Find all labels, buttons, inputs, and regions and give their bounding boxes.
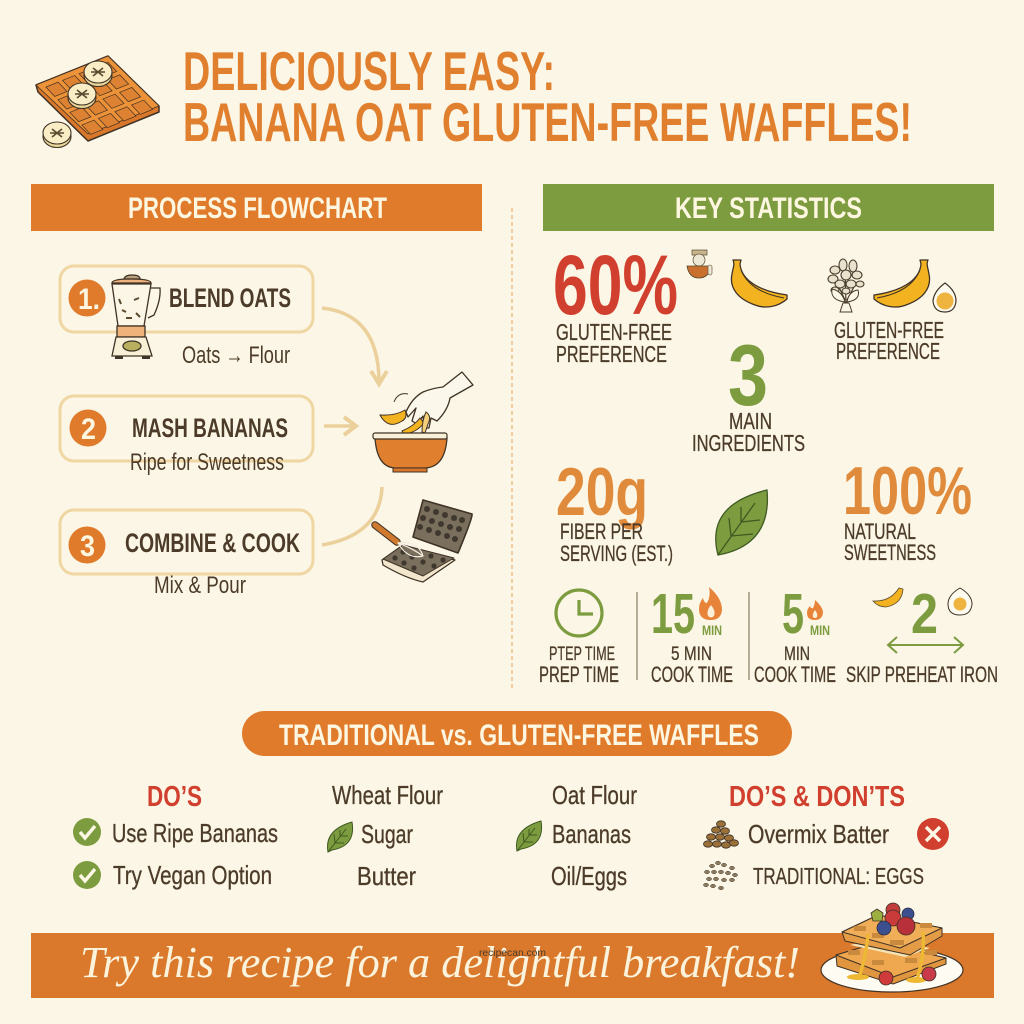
panel: process flowchart header: PROCESS FLOWCHART xyxy=(128,192,387,225)
column: do's and don'ts: Overmix Batter xyxy=(748,819,889,849)
stat: 60% gluten-free preference: GLUTEN-FREE xyxy=(556,319,672,345)
stat: gluten-free preference: GLUTEN-FREE xyxy=(834,317,944,343)
icon: waffle iron with whisk xyxy=(375,500,472,582)
stat: 15 min cook time: MIN xyxy=(702,622,722,638)
panel: step 3 combine and cook: 3 xyxy=(80,530,95,563)
title: DELICIOUSLY EASY: xyxy=(183,40,555,102)
stat: 3 main ingredients: MAIN xyxy=(729,408,772,434)
stat: 20g fiber: 20g xyxy=(556,454,648,530)
stat: 5 min cook time: MIN xyxy=(784,644,810,665)
stat: 60% gluten-free preference: PREFERENCE xyxy=(556,341,667,367)
icon: small banana xyxy=(873,588,903,607)
stat: prep time with clock xyxy=(539,590,619,687)
stat: 2 skip preheat iron: 2 xyxy=(911,582,938,646)
stat: 15 min cook time: 5 MIN xyxy=(671,644,712,665)
banner: footer: Try this recipe for a delightful breakfast! xyxy=(80,938,800,987)
stat: 100% natural sweetness: SWEETNESS xyxy=(844,540,936,565)
panel: step 1 blend oats: BLEND OATS xyxy=(169,283,291,313)
banner: footer: recipecan.com xyxy=(479,947,546,959)
icon: wheat bundle, banana and egg xyxy=(828,259,956,312)
arrow: bowl to combine xyxy=(322,487,382,545)
icon: blender xyxy=(112,275,160,359)
stat: 100% natural sweetness: NATURAL xyxy=(844,519,916,544)
icon: waffle with banana slices xyxy=(36,56,159,148)
panel: step 2 mash bananas: MASH BANANAS xyxy=(132,413,288,443)
stat: gluten-free preference: PREFERENCE xyxy=(836,338,940,364)
stat: prep time with clock: PTEP TIME xyxy=(549,644,615,665)
title xyxy=(183,40,912,153)
column: traditional ingredients: Wheat Flour xyxy=(332,780,443,810)
panel: step 1 blend oats: 1. xyxy=(78,283,100,316)
arrow: mash to bowl xyxy=(324,417,356,435)
column: traditional ingredients: Butter xyxy=(357,861,416,891)
stat: 20g fiber: FIBER PER xyxy=(560,519,643,544)
stat: 15 min cook time xyxy=(651,582,733,687)
icon: honey pot xyxy=(687,250,712,278)
stat: 3 main ingredients: 3 xyxy=(728,328,768,424)
arrow: blend to bowl xyxy=(322,308,387,384)
panel: step 3 combine and cook: COMBINE & COOK xyxy=(125,528,300,558)
column: traditional ingredients xyxy=(328,780,443,891)
icon: red cross xyxy=(917,818,949,850)
heading: comparison pill: TRADITIONAL vs. GLUTEN-FREE WAFFLES xyxy=(279,719,759,752)
panel: step 3 combine and cook: Mix & Pour xyxy=(154,572,246,599)
column: do's: Try Vegan Option xyxy=(113,860,272,890)
stat: 100% natural sweetness: 100% xyxy=(843,453,972,529)
stat: 20g fiber: SERVING (EST.) xyxy=(560,541,673,566)
stat: 2 skip preheat iron xyxy=(846,582,998,687)
icon: waffle stack on plate xyxy=(821,903,963,992)
column: gluten-free ingredients: Oat Flour xyxy=(552,780,637,810)
stat: 15 min cook time: COOK TIME xyxy=(651,662,733,687)
banner: footer xyxy=(31,933,994,998)
icon: scattered oats xyxy=(703,861,738,890)
panel: step 2 mash bananas: 2 xyxy=(81,413,96,446)
stat: 20g fiber xyxy=(556,454,673,566)
column: gluten-free ingredients: Bananas xyxy=(552,819,631,849)
stat: 5 min cook time xyxy=(754,582,836,687)
column: gluten-free ingredients: Oil/Eggs xyxy=(551,861,627,891)
stat: 60% gluten-free preference: 60% xyxy=(553,238,678,332)
column: do's and don'ts xyxy=(703,781,949,890)
panel: step 2 mash bananas: Ripe for Sweetness xyxy=(130,449,284,476)
panel: step 1 blend oats xyxy=(60,266,313,369)
panel: step 1 blend oats: Oats → Flour xyxy=(182,342,290,369)
column: do's xyxy=(73,781,278,890)
panel: step 2 mash bananas xyxy=(60,396,313,476)
column: gluten-free ingredients xyxy=(516,780,637,891)
icon: flame xyxy=(699,587,722,620)
arrow: double headed xyxy=(888,637,963,653)
stat: 3 main ingredients xyxy=(692,328,805,456)
icon: oat pile xyxy=(704,821,738,848)
icon: mixing bowl with hand and bananas xyxy=(373,372,473,472)
panel: key statistics header: KEY STATISTICS xyxy=(675,192,862,225)
stat: 3 main ingredients: INGREDIENTS xyxy=(692,430,805,456)
column: traditional ingredients: Sugar xyxy=(361,819,413,849)
panel: key statistics header xyxy=(543,184,994,231)
heading: comparison pill xyxy=(242,711,792,756)
stat: 5 min cook time: COOK TIME xyxy=(754,662,836,687)
icon: clock xyxy=(556,590,602,636)
stat: prep time with clock: PREP TIME xyxy=(539,662,619,687)
stat: 100% natural sweetness xyxy=(843,453,972,565)
panel: process flowchart header xyxy=(31,184,482,231)
icon: banana xyxy=(731,260,787,307)
column: do's and don'ts: DO’S & DON’TS xyxy=(729,781,905,813)
icon: leaf xyxy=(716,490,767,555)
column: do's: DO’S xyxy=(147,781,202,813)
stat: 5 min cook time: MIN xyxy=(810,622,830,638)
column: do's: Use Ripe Bananas xyxy=(112,818,278,848)
stat: gluten-free preference xyxy=(834,317,944,364)
stat: 5 min cook time: 5 xyxy=(782,582,804,646)
icon: small egg xyxy=(948,588,972,615)
panel: step 3 combine and cook xyxy=(60,510,313,599)
stat: 15 min cook time: 15 xyxy=(651,582,695,646)
stat: 60% gluten-free preference xyxy=(553,238,678,367)
column: do's and don'ts: TRADITIONAL: EGGS xyxy=(753,863,924,889)
icon: flame xyxy=(807,600,823,620)
